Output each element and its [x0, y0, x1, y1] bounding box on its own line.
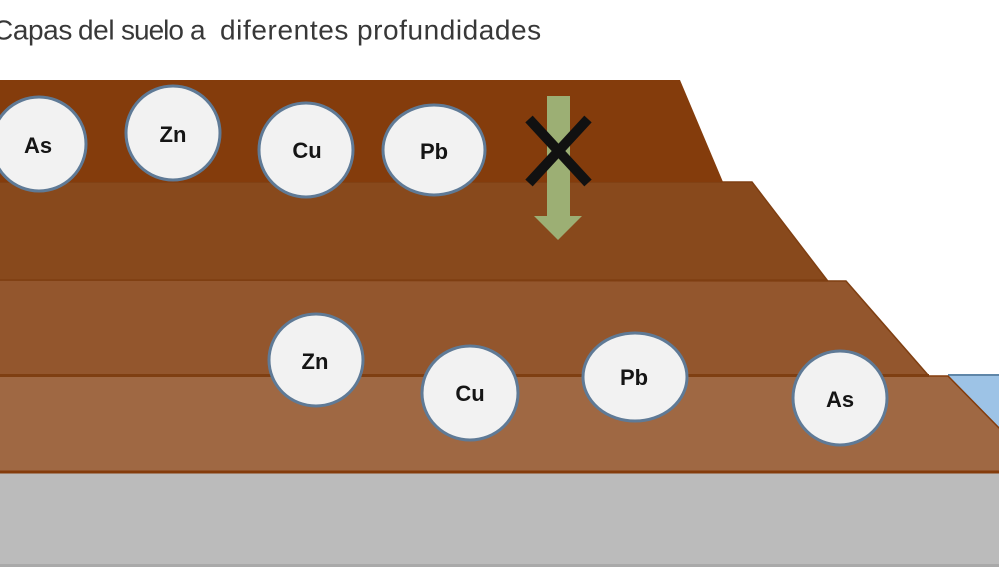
circle: As top: As: [24, 133, 52, 158]
circle: Cu top: [259, 103, 353, 197]
arrow: downward: [534, 96, 582, 240]
circle: Pb bottom: [583, 333, 687, 421]
title: del: [78, 14, 122, 46]
circle: As bottom: [793, 351, 887, 445]
icon: black cross: [529, 119, 588, 183]
layer 4 base line: [0, 470, 999, 474]
circle: As top: [0, 97, 86, 191]
soil layer 4: [0, 376, 999, 472]
title: suelo: [121, 14, 190, 46]
circle: Zn bottom: [269, 314, 363, 406]
title: profundidades: [357, 14, 542, 46]
soil layer 3: [0, 280, 928, 375]
soil layer 1: [0, 80, 723, 182]
water: [948, 375, 999, 432]
circle: Pb bottom: Pb: [620, 365, 648, 390]
layer 3 base line: [0, 374, 929, 377]
circle: Zn bottom: Zn: [302, 349, 328, 374]
bedrock layer: [0, 472, 999, 567]
soil layer 2: [0, 182, 827, 280]
circle: Zn top: [126, 86, 220, 180]
circle: Zn top: Zn: [160, 122, 186, 147]
circle: Pb top: [383, 105, 485, 195]
circle: Pb top: Pb: [420, 139, 448, 164]
title: diferentes: [220, 14, 357, 46]
title: a: [190, 14, 213, 46]
circle: As bottom: As: [826, 387, 854, 412]
circle: Cu top: Cu: [292, 138, 322, 163]
circle: Cu bottom: [422, 346, 518, 440]
circle: Cu bottom: Cu: [455, 381, 485, 406]
